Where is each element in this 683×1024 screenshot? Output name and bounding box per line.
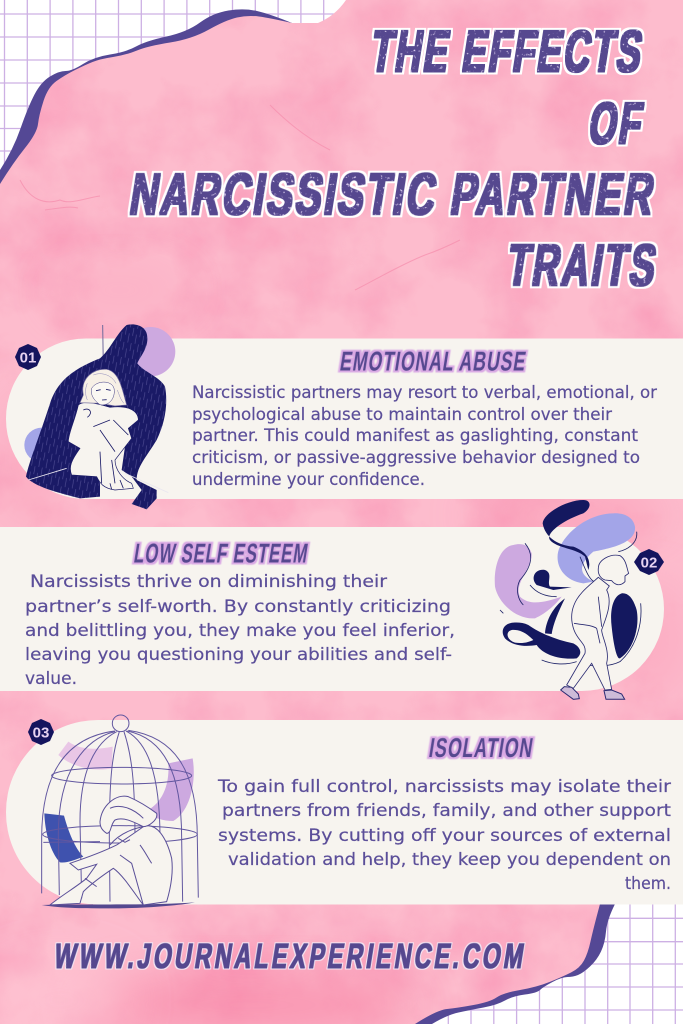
- badge 01: [15, 344, 41, 370]
- text block: low self esteem: Narcissists thrive on diminishing their: [30, 572, 387, 592]
- title: OF: [585, 90, 649, 156]
- icon: person walking through swirling shapes: [495, 500, 641, 699]
- badge 02: 02: [641, 554, 657, 572]
- text block: emotional abuse: psychological abuse to maintain control over their: [192, 405, 612, 425]
- heading: emotional abuse: EMOTIONAL ABUSE: [338, 346, 529, 376]
- icon: girl sitting in bird cage: [42, 715, 198, 908]
- panel: isolation: [6, 715, 683, 908]
- text block: low self esteem: leaving you questioning your abilities and self-: [25, 645, 452, 665]
- panel: low self esteem: [0, 500, 664, 699]
- text block: emotional abuse: partner. This could manifest as gaslighting, constant: [192, 426, 638, 446]
- text block: isolation: them.: [625, 874, 671, 894]
- badge 01: 01: [20, 350, 36, 366]
- text block: low self esteem: [25, 572, 455, 689]
- title: [126, 18, 663, 298]
- badge 03: [28, 719, 54, 745]
- heading: isolation: ISOLATION: [427, 732, 536, 763]
- text block: isolation: systems. By cutting off your sources of external: [218, 826, 671, 846]
- text block: emotional abuse: [192, 383, 657, 490]
- icon: shadow figure looming over girl: [24, 324, 175, 509]
- badge 02: [634, 549, 664, 575]
- text block: isolation: partners from friends, family, and other support: [222, 801, 671, 821]
- panel 3 background pill: [6, 720, 683, 904]
- text block: isolation: To gain full control, narcissists may isolate their: [217, 777, 671, 797]
- torn edge band: bottom right: [405, 904, 615, 1024]
- badge 03: 03: [33, 724, 49, 742]
- text block: isolation: validation and help, they keep you dependent on: [228, 850, 671, 870]
- text block: low self esteem: value.: [25, 669, 77, 689]
- heading: low self esteem: LOW SELF ESTEEM: [132, 538, 311, 568]
- text block: emotional abuse: Narcissistic partners may resort to verbal, emotional, or: [192, 383, 657, 403]
- torn edge band: top left: [0, 9, 292, 190]
- text block: low self esteem: partner’s self-worth. By constantly criticizing: [25, 597, 451, 617]
- panel: emotional abuse: [6, 324, 683, 509]
- text block: low self esteem: and belittling you, they make you feel inferior,: [25, 621, 455, 641]
- text block: emotional abuse: undermine your confidence.: [192, 470, 425, 490]
- text block: isolation: [217, 777, 671, 894]
- text block: emotional abuse: criticism, or passive-aggressive behavior designed to: [192, 448, 640, 468]
- panel 2 background pill: [0, 527, 664, 691]
- panel 1 background pill: [6, 338, 683, 499]
